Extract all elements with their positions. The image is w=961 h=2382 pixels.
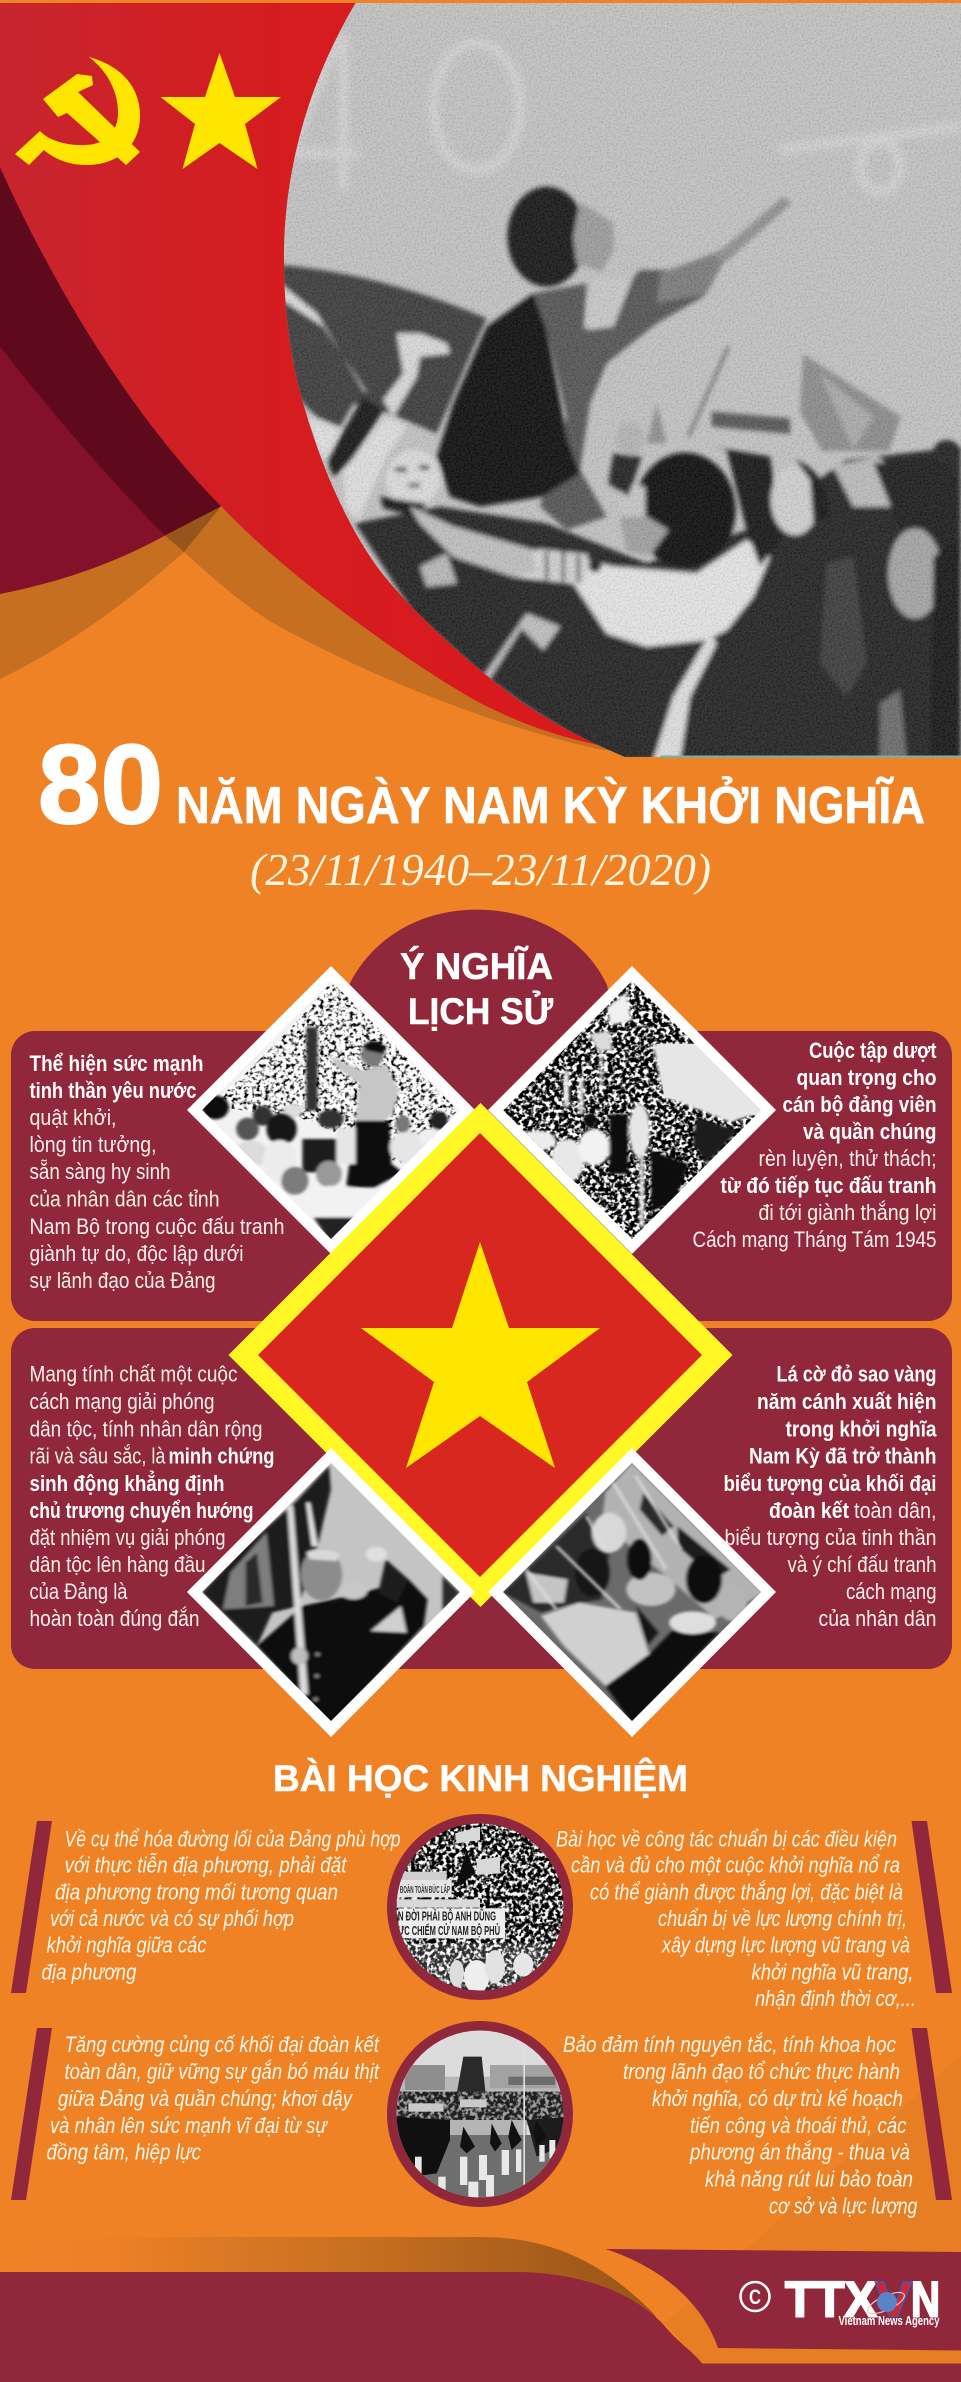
curved shadow band	[0, 400, 660, 757]
lesson text: right 2: Bảo đảm tính nguyên tắc, tính khoa học	[563, 2032, 896, 2057]
photo diamond: bottom left, man raising fist	[185, 1446, 488, 1739]
lesson text: right 2: cơ sở và lực lượng	[769, 2194, 918, 2218]
lesson text: left 2: toàn dân, giữ vững sự gắn bó máu thịt	[64, 2059, 380, 2084]
text block: bottom right: năm cánh xuất hiện	[757, 1389, 936, 1414]
text block: bottom left: chủ trương chuyển hướng	[30, 1498, 254, 1523]
yellow border	[228, 1103, 732, 1607]
text block: bottom right: cách mạng	[846, 1579, 936, 1604]
photo diamond: bottom right, crowd with palm leaves and spears	[488, 1446, 776, 1739]
circular photo: rally with banners: ĐOÀN TOÀN ĐỨC LẬP	[400, 1883, 450, 1896]
right flag and banners	[800, 354, 901, 451]
photo diamond: top left, woman speaking to seated crowd	[185, 964, 488, 1257]
text block: top left: sự lãnh đạo của Đảng	[30, 1268, 216, 1293]
lesson text: right 1: khởi nghĩa vũ trang,	[752, 1960, 914, 1984]
lesson text: right 1: có thể giành được thắng lợi, đặc biệt là	[590, 1880, 903, 1904]
carrying man arm and white shirt	[513, 536, 774, 651]
teal line below photo	[660, 756, 961, 758]
banner	[280, 265, 487, 433]
text block: top left: sẵn sàng hy sinh	[30, 1159, 170, 1184]
dark maroon curved shape	[0, 167, 221, 536]
lesson text: right 1	[556, 1826, 916, 2011]
title: 80	[38, 722, 163, 847]
text block: bottom right	[724, 1362, 937, 1631]
red V of wordmark: V	[875, 2272, 913, 2328]
footer faint diagonal band	[665, 2055, 961, 2364]
text block: top right: quan trọng cho	[796, 1065, 936, 1090]
slanted bar: left 1	[11, 1821, 52, 1993]
lesson text: left 1: địa phương	[42, 1960, 137, 1984]
text block: bottom right: toàn dân,	[854, 1498, 936, 1523]
lesson text: right 1: nhận định thời cơ,...	[755, 1986, 916, 2011]
lesson text: right 2: phương án thắng - thua và	[689, 2140, 910, 2164]
text block: top right: từ đó tiếp tục đấu tranh	[720, 1173, 936, 1198]
date subtitle: (23/11/1940–23/11/2020)	[250, 845, 711, 895]
text block: top left: quật khởi,	[30, 1105, 116, 1130]
text block: bottom left: dân tộc, tính nhân dân rộng	[30, 1416, 262, 1442]
lower crowd	[355, 447, 961, 760]
dark overlap wedge	[165, 506, 221, 552]
footer logo plate	[606, 2249, 961, 2350]
slanted bar: right 2	[912, 2028, 952, 2200]
raised figure	[533, 270, 710, 530]
title	[38, 722, 925, 847]
icon: globe with orbit	[865, 2288, 907, 2318]
lesson text: left 1: với thực tiễn địa phương, phải đặt	[64, 1852, 347, 1878]
heads	[634, 453, 736, 567]
text block: bottom left: của Đảng là	[30, 1579, 128, 1604]
N of wordmark: N	[911, 2272, 940, 2328]
panel: upper maroon band	[11, 1031, 952, 1321]
red diamond	[258, 1133, 702, 1577]
text block: bottom left	[30, 1362, 274, 1631]
text block: top left: giành tự do, độc lập dưới	[30, 1241, 244, 1266]
lesson text: right 2	[563, 2032, 918, 2218]
lesson text: right 2: khả năng rút lui bảo toàn	[705, 2166, 913, 2192]
text block: top left: của nhân dân các tỉnh	[30, 1186, 220, 1212]
text block: bottom left: cách mạng giải phóng	[30, 1389, 214, 1414]
photo diamond: top right, crowd with flags	[488, 964, 776, 1257]
lesson text: left 2: đồng tâm, hiệp lực	[46, 2140, 201, 2164]
text block: bottom left: hoàn toàn đúng đắn	[30, 1606, 200, 1631]
text block: top right: đi tới giành thắng lợi	[758, 1200, 936, 1225]
text block: top left: lòng tin tưởng,	[30, 1132, 156, 1157]
text block: bottom left: đặt nhiệm vụ giải phóng	[30, 1525, 226, 1550]
heading: historical significance: LỊCH SỬ	[408, 990, 553, 1032]
text block: bottom left: rãi và sâu sắc, là	[30, 1444, 166, 1468]
lesson text: left 1	[42, 1826, 400, 1984]
lesson text: left 2: và nhân lên sức mạnh vĩ đại từ sự	[50, 2113, 329, 2138]
slanted bar: right 1	[912, 1821, 952, 1993]
text block: bottom left: minh chứng	[168, 1444, 274, 1468]
text block: bottom right: đoàn kết	[769, 1498, 850, 1523]
icon: yellow star	[160, 53, 281, 169]
text block: bottom right: và ý chí đấu tranh	[788, 1552, 936, 1577]
text block: top left: tinh thần yêu nước	[30, 1078, 196, 1103]
circular photo: rally with banners	[387, 1814, 573, 2000]
text block: top left: Nam Bộ trong cuộc đấu tranh	[30, 1214, 284, 1239]
footer maroon wave	[0, 2272, 961, 2382]
TTX wordmark: TTX	[785, 2272, 877, 2328]
photo grain	[280, 0, 961, 760]
heading: historical significance: Ý NGHĨA	[400, 945, 553, 987]
lesson text: left 2: Tăng cường củng cố khối đại đoàn kết	[64, 2032, 380, 2057]
lesson text: left 2	[46, 2032, 380, 2164]
text block: top right: rèn luyện, thử thách;	[758, 1146, 936, 1171]
lesson text: left 1: Về cụ thể hóa đường lối của Đảng phù hợp	[64, 1826, 400, 1852]
footer shadow curve	[0, 2237, 662, 2325]
circular photo: rally with banners: ỰC CHIẾM CỬ NAM BỘ PHỦ	[398, 1923, 500, 1938]
lesson text: right 2: khởi nghĩa, có dự trù kế hoạch	[652, 2086, 903, 2111]
heading: historical significance	[400, 945, 553, 1032]
heading: lessons learned: BÀI HỌC KINH NGHIỆM	[273, 1757, 688, 1799]
lesson text: right 1: chuẩn bị về lực lượng chính trị,	[658, 1906, 907, 1931]
text block: bottom left: Mang tính chất một cuộc	[30, 1362, 238, 1386]
lesson text: left 1: với cả nước và có sự phối hợp	[50, 1906, 294, 1931]
circular photo: parade with tower	[387, 2021, 573, 2208]
text block: bottom left: dân tộc lên hàng đầu	[30, 1552, 206, 1577]
slanted bar: left 2	[11, 2028, 52, 2200]
text block: top right: Cuộc tập dượt	[809, 1038, 937, 1063]
text block: bottom right: biểu tượng của tinh thần	[724, 1525, 936, 1550]
text block: bottom left: sinh động khẳng định	[30, 1471, 224, 1496]
lesson text: right 1: Bài học về công tác chuẩn bị các điều kiện	[556, 1826, 897, 1852]
text block: top left: Thể hiện sức mạnh	[30, 1051, 204, 1076]
circular photo: rally with banners: N ĐỜI PHẢI BỘ ANH DŨNG	[398, 1908, 496, 1924]
yellow star	[361, 1242, 600, 1468]
text block: bottom right: của nhân dân	[818, 1606, 936, 1631]
lesson text: right 2: tiến công và thoái thủ, các	[690, 2113, 906, 2138]
panel: lower maroon band	[11, 1328, 952, 1669]
text block: top left	[30, 1051, 284, 1293]
lesson text: right 2: trong lãnh đạo tổ chức thực hành	[623, 2059, 900, 2084]
heading dome	[310, 910, 650, 1200]
icon: copyright mark: C	[749, 2286, 761, 2309]
text block: bottom right: trong khởi nghĩa	[786, 1416, 937, 1442]
icon: copyright mark	[740, 2282, 770, 2311]
lesson text: left 2: giữa Đảng và quần chúng; khơi dậy	[58, 2086, 354, 2111]
icon: hammer and sickle	[15, 57, 140, 165]
central flag diamond	[228, 1103, 732, 1607]
text block: bottom right: Nam Kỳ đã trở thành	[749, 1444, 936, 1468]
hero photo: Nam Ky uprising painting	[280, 0, 961, 760]
faint background numerals	[290, 33, 960, 192]
text block: top right: cán bộ đảng viên	[782, 1092, 936, 1117]
lesson text: right 1: xây dựng lực lượng vũ trang và	[661, 1932, 910, 1958]
text block: top right: và quần chúng	[803, 1119, 936, 1144]
logo: copyright and TTXVN	[740, 2272, 940, 2328]
left face	[386, 450, 441, 507]
lesson text: left 1: khởi nghĩa giữa các	[46, 1932, 206, 1958]
maroon curved shape	[0, 300, 165, 594]
red curved shape	[0, 3, 961, 757]
lesson text: left 1: địa phương trong mối tương quan	[55, 1880, 338, 1904]
text block: top right	[692, 1038, 937, 1252]
lesson text: right 1: cần và đủ cho một cuộc khởi nghĩa nổ ra	[571, 1852, 900, 1878]
